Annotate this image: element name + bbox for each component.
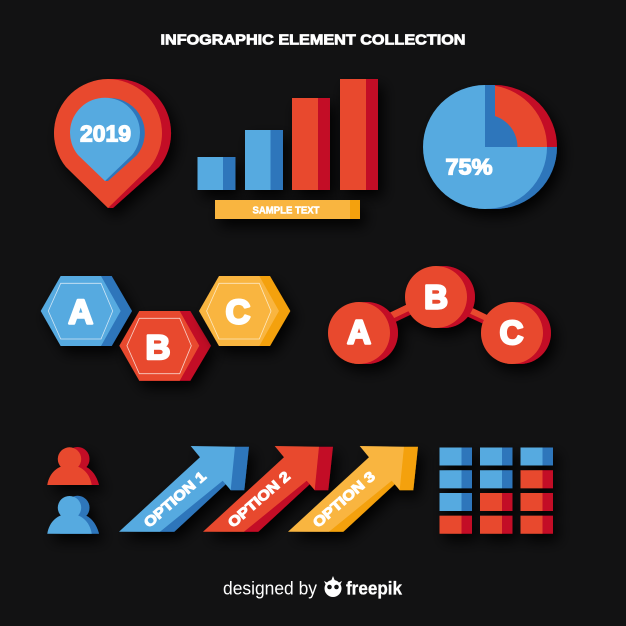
year label: 2019: [80, 120, 131, 146]
bar 1: [198, 157, 236, 190]
user icon blue: [47, 496, 99, 534]
bar 3: [292, 98, 330, 190]
arrow option 3: [288, 446, 418, 532]
block grid chart: [440, 448, 553, 534]
arrow option 2: [203, 446, 333, 532]
bar 2: [245, 130, 283, 190]
arrow option 1: OPTION 1: [140, 468, 209, 531]
row 4: [440, 516, 553, 534]
hexagon B: [119, 311, 211, 381]
freepik wordmark: freepik: [346, 578, 403, 598]
row 2: [440, 470, 553, 488]
location pin 2019: [54, 79, 171, 208]
footer attribution: [223, 576, 403, 598]
connected circles A B C: [328, 266, 551, 364]
circle C: [481, 302, 551, 364]
sample text banner: [215, 200, 360, 219]
title: INFOGRAPHIC ELEMENT COLLECTION: [160, 32, 466, 48]
pie chart 75%: [423, 85, 557, 209]
circle B: [405, 266, 475, 328]
row 3: [440, 493, 553, 511]
hexagon C: C: [226, 294, 250, 332]
arrow option 2: OPTION 2: [224, 468, 293, 531]
hexagon C: [199, 276, 290, 346]
hexagon A: A: [68, 294, 93, 332]
circle C: C: [500, 314, 523, 351]
bar chart: [198, 79, 378, 190]
circle A: [328, 302, 398, 364]
circle A: A: [347, 314, 371, 350]
sample text banner: SAMPLE TEXT: [252, 206, 320, 216]
arrow option 1: [119, 446, 249, 532]
row 1: [440, 448, 553, 466]
bar 4: [340, 79, 378, 190]
percent label: 75%: [446, 154, 492, 180]
user icon red: [47, 447, 99, 485]
hexagon A: [41, 276, 132, 346]
arrow option 3: OPTION 3: [309, 468, 378, 531]
connector lines: [385, 304, 487, 325]
icon: freepik mascot: [324, 576, 342, 597]
designed by: designed by: [223, 578, 317, 598]
infographic canvas: [40, 34, 562, 599]
hexagon B: B: [146, 329, 170, 367]
circle B: B: [424, 278, 448, 316]
